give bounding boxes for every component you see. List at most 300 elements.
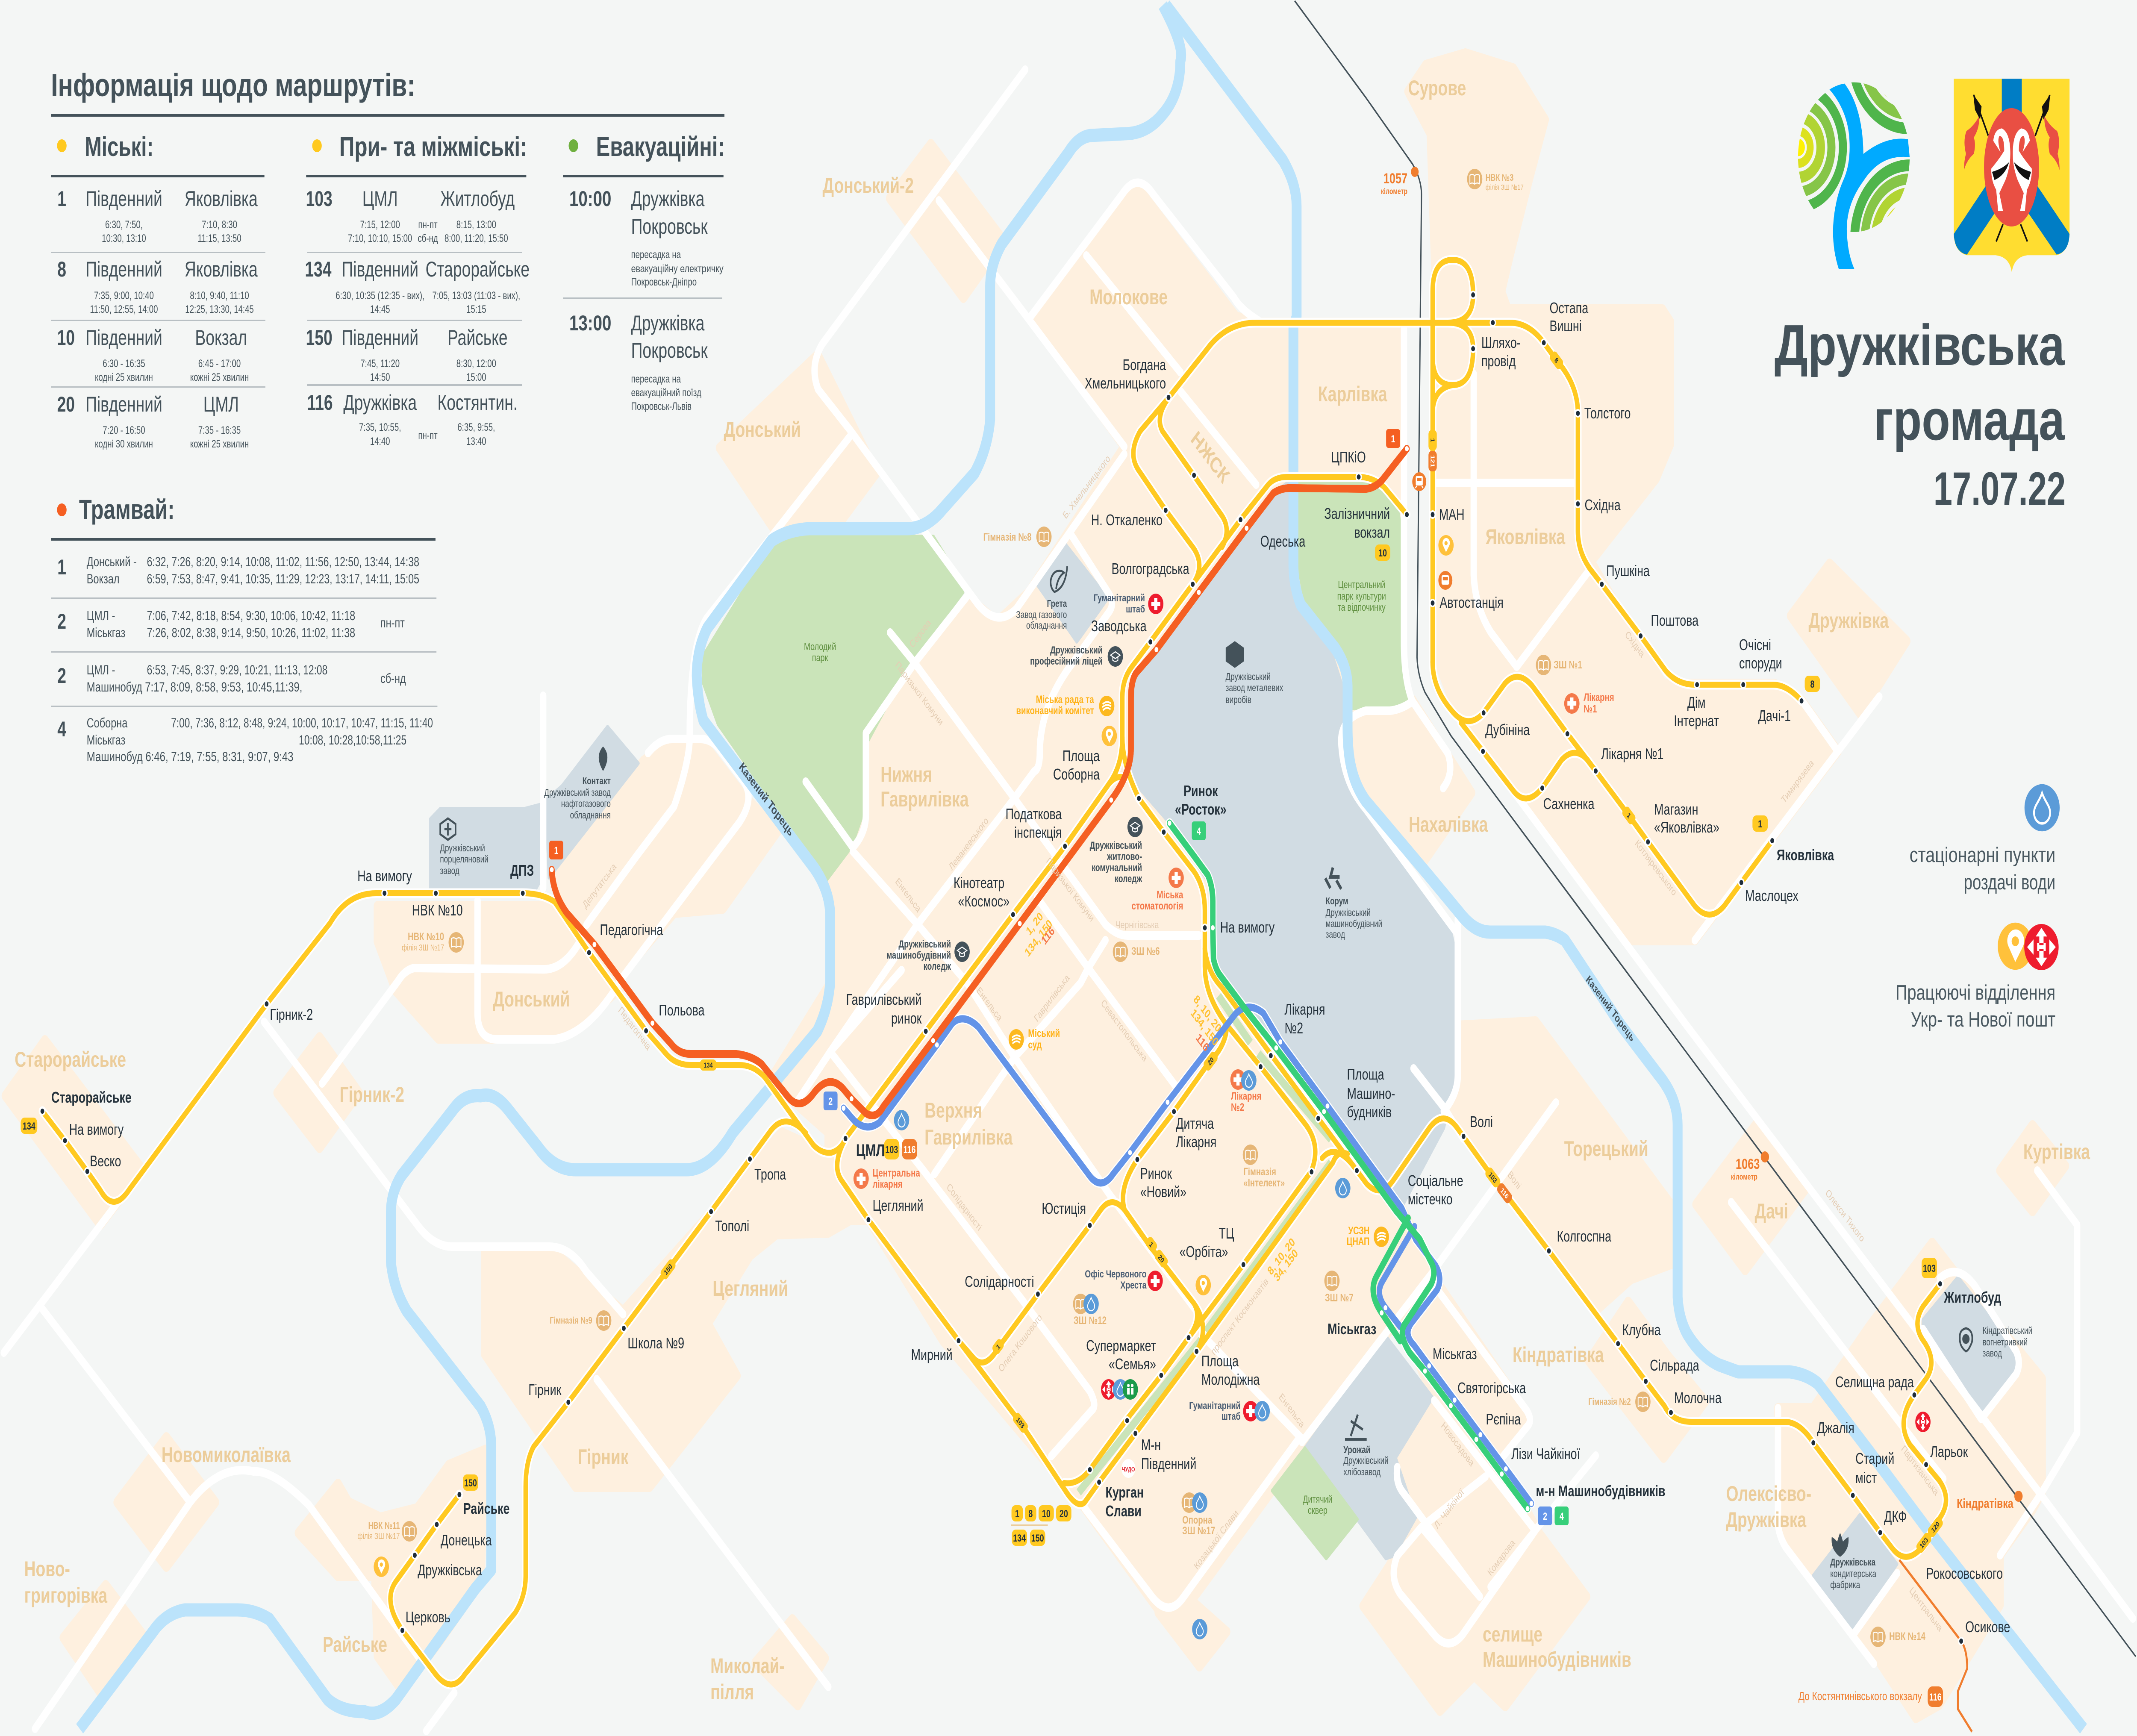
station names: Колгоспна: [1557, 1227, 1611, 1245]
panel: tram schedule: 10:08, 10:28,10:58,11:25: [299, 733, 406, 747]
panel: tram schedule: 1: [57, 556, 66, 579]
station names: ДКФ: [1884, 1508, 1907, 1525]
panel: suburban and intercity routes: 7:35, 10:55,: [359, 421, 401, 433]
station names: вокзал: [1354, 524, 1390, 541]
panel: suburban and intercity routes: 6:35, 9:55,: [457, 421, 495, 433]
railway stops: Кіндратівка: [1957, 1496, 2013, 1511]
river names: Казений Торець: [1584, 973, 1637, 1044]
district names: селище: [1483, 1623, 1542, 1646]
street names: Севастопольська: [1099, 997, 1149, 1064]
station names: Школа №9: [627, 1334, 684, 1352]
panel: suburban and intercity routes: 15:15: [466, 303, 486, 315]
street names: Енгельса: [894, 876, 922, 915]
station names: Дитяча: [1176, 1115, 1214, 1132]
station names: міст: [1855, 1469, 1877, 1486]
station names: Міськгаз: [1433, 1345, 1477, 1362]
panel: tram schedule: 2: [57, 664, 66, 688]
panel: tram schedule: [51, 494, 437, 764]
stations on bus routes: [40, 291, 1964, 1645]
terminus pills: tram and orange routes: [549, 429, 1943, 1707]
terminus pills: bus routes: 8: [1028, 1509, 1033, 1520]
station names: «Орбіта»: [1180, 1243, 1228, 1260]
panel: evacuation routes: пересадка на: [631, 248, 681, 261]
station names: [51, 299, 2010, 1636]
panel: city routes: Міські:: [85, 131, 153, 162]
station names: ЦМЛ: [856, 1141, 885, 1160]
street names: Педагогічна: [617, 1005, 652, 1053]
panel: tram schedule: Міськгаз: [87, 625, 125, 640]
points of interest: labels: Дружківський: [1050, 645, 1103, 656]
station names: Інтернат: [1674, 712, 1719, 730]
district names: Гірник-2: [340, 1083, 404, 1106]
points of interest: labels: №1: [1584, 703, 1597, 715]
station names: Супермаркет: [1086, 1337, 1156, 1354]
station names: Юстиція: [1042, 1200, 1086, 1217]
panel: evacuation routes: 10:00: [569, 187, 611, 211]
route number annotations: [1023, 910, 1300, 1284]
panel: city routes: Південний: [85, 258, 162, 281]
district names: Гаврилівка: [880, 788, 969, 811]
route tags on the lines: 121: [1429, 455, 1435, 467]
station names: Церковь: [406, 1608, 450, 1626]
station names: №2: [1284, 1019, 1303, 1037]
points of interest: labels: коледж: [1115, 874, 1142, 885]
street names: Солідарності: [945, 1181, 983, 1233]
district names: Машинобудівників: [1483, 1648, 1631, 1671]
route number annotations: 116: [1194, 1031, 1211, 1054]
station names: Осикове: [1965, 1618, 2010, 1636]
factory labels: [440, 599, 2032, 1591]
route tags on the lines: 103: [1015, 1416, 1026, 1430]
panel: suburban and intercity routes: 7:10, 10:10, 15:00: [348, 232, 412, 244]
heading: route information: [51, 68, 725, 764]
points of interest: labels: професійний ліцей: [1030, 656, 1103, 667]
station names: Старий: [1855, 1450, 1894, 1467]
station names: Тополі: [715, 1217, 749, 1235]
station names: містечко: [1408, 1190, 1453, 1208]
street names: Олекси Тихого: [1824, 1187, 1866, 1244]
station names: Ларьок: [1930, 1443, 1968, 1460]
panel: city routes: 6:30, 7:50,: [105, 218, 143, 231]
station names: Дім: [1687, 694, 1705, 711]
park labels: та відпочинку: [1338, 602, 1386, 613]
panel: suburban and intercity routes: 15:00: [466, 371, 486, 383]
points of interest: labels: Гімназія №2: [1588, 1397, 1631, 1407]
panel: city routes: Яковлівка: [185, 258, 258, 281]
station names: Очісні: [1739, 636, 1771, 653]
factory labels: Корум: [1326, 896, 1348, 907]
factory labels: Дружківський: [1343, 1456, 1389, 1466]
points of interest: labels: [357, 173, 1926, 1703]
points of interest: labels: стоматологія: [1132, 900, 1183, 912]
title: Дружківська: [1775, 313, 2065, 377]
points of interest: labels: коледж: [924, 961, 951, 972]
panel: suburban and intercity routes: 8:30, 12:00: [456, 357, 496, 370]
station names: споруди: [1739, 654, 1782, 672]
street names: Серова: [908, 617, 933, 650]
factory labels: Дружківський: [440, 843, 485, 854]
logo: coat of arms: [1954, 79, 2069, 272]
points of interest: labels: Гуманітарний: [1094, 593, 1145, 604]
points of interest: labels: філія ЗШ №17: [402, 943, 444, 953]
factory labels: фабрика: [1830, 1580, 1860, 1591]
factory labels: Дружківський: [1326, 908, 1371, 918]
district names: Донський-2: [823, 174, 914, 197]
legend: water points: стаціонарні пункти: [1910, 844, 2055, 867]
terminus pills: bus routes: 20: [1060, 1509, 1068, 1520]
tram route 1 (orange): [552, 449, 1407, 1115]
points of interest: labels: Міська: [1157, 889, 1183, 901]
points of interest: labels: ЗШ №7: [1325, 1292, 1354, 1304]
points of interest: labels: філія ЗШ №17: [1486, 183, 1524, 192]
terminus pills: bus routes: 1: [1015, 1509, 1019, 1520]
station names: «Росток»: [1175, 800, 1227, 818]
station names: Поштова: [1651, 612, 1698, 629]
district names: Яковлівка: [1486, 525, 1565, 549]
district names: Олексієво-: [1726, 1482, 1811, 1506]
panel: city routes: 10: [57, 326, 75, 350]
district names: Дружківка: [1726, 1508, 1807, 1532]
railway stops: кілометр: [1731, 1172, 1757, 1182]
district names: григорівка: [24, 1584, 107, 1607]
yellow bus routes: [42, 260, 1946, 1685]
points of interest: labels: Офіс Червоного: [1085, 1269, 1147, 1280]
route tags on the lines: 20: [1207, 1056, 1215, 1067]
panel: city routes: 7:35 - 16:35: [198, 424, 241, 436]
panel: city routes: 11:50, 12:55, 14:00: [90, 303, 158, 315]
panel: city routes: 7:35, 9:00, 10:40: [94, 289, 154, 302]
district names: Ново-: [24, 1557, 70, 1581]
district names: Донський: [493, 988, 570, 1011]
panel: suburban and intercity routes: Житлобуд: [440, 187, 515, 211]
points of interest: labels: штаб: [1222, 1411, 1241, 1422]
points of interest: labels: Дружківський: [1090, 840, 1142, 851]
factory labels: Кіндратівський: [1982, 1326, 2032, 1336]
route number annotations: 1, 20: [1024, 910, 1045, 938]
terminus pills: bus routes: 103: [1923, 1263, 1936, 1274]
route number annotations: 8, 10, 20: [1266, 1236, 1297, 1278]
street names: Леваневського: [947, 815, 990, 873]
icon: Chudo store: [1121, 1459, 1136, 1478]
points of interest: labels: Дружківський: [898, 939, 951, 950]
points of interest: labels: УСЗН: [1348, 1224, 1369, 1237]
station names: Податкова: [1006, 805, 1062, 823]
station names: Ринок: [1140, 1165, 1172, 1182]
station names: Соборна: [1053, 765, 1100, 783]
station names: Лікарня: [1284, 1000, 1325, 1018]
route number annotations: 116: [1039, 924, 1057, 947]
factory labels: Дружківська: [1830, 1557, 1876, 1568]
panel: suburban and intercity routes: Південний: [341, 326, 418, 350]
points of interest: labels: «Інтелект»: [1243, 1177, 1285, 1189]
station names: Донецька: [441, 1531, 492, 1549]
street names: Олега Кошового: [997, 1312, 1044, 1374]
points of interest: labels: Хреста: [1120, 1280, 1147, 1291]
panel: suburban and intercity routes: Дружківка: [343, 391, 417, 415]
panel: evacuation routes: Покровськ-Львів: [631, 400, 692, 412]
points of interest: labels: НВК №11: [368, 1521, 400, 1531]
panel: suburban and intercity routes: [305, 131, 530, 447]
station names: Волі: [1470, 1113, 1493, 1130]
panel: tram schedule: 2: [57, 610, 66, 633]
station names: Кінотеатр: [954, 874, 1004, 892]
railway stops: 1063: [1736, 1156, 1760, 1172]
panel: evacuation routes: Дружківка: [631, 187, 705, 211]
median green strip on boulevard: [1079, 996, 1331, 1492]
panel: suburban and intercity routes: 103: [306, 187, 333, 211]
station names: Південний: [1141, 1455, 1196, 1472]
terminus pills: tram and orange routes: 4: [1197, 826, 1201, 837]
legend: post offices: Працюючі відділення: [1896, 981, 2055, 1004]
panel: suburban and intercity routes: При- та міжміські:: [339, 131, 527, 162]
points of interest: labels: НВК №14: [1889, 1630, 1926, 1642]
park labels: [804, 580, 1386, 1516]
district names: Верхня: [924, 1099, 982, 1122]
factory labels: обладнання: [1026, 621, 1067, 631]
district names: Нижня: [880, 763, 932, 786]
panel: city routes: Південний: [85, 326, 162, 350]
district names: Дружківка: [1809, 609, 1889, 633]
station names: Польова: [659, 1001, 705, 1019]
station names: Пушкіна: [1606, 562, 1650, 580]
station names: Дубініна: [1485, 721, 1530, 739]
route number annotations: 134, 150: [1189, 1006, 1220, 1049]
panel: suburban and intercity routes: 134: [305, 258, 332, 281]
points of interest: labels: Гімназія №9: [550, 1315, 592, 1326]
terminus pills: bus routes: 10: [1042, 1509, 1051, 1520]
station names: ДПЗ: [510, 862, 534, 879]
district names: Гаврилівка: [924, 1126, 1013, 1149]
station names: Маслоцех: [1745, 887, 1798, 904]
factory labels: Грета: [1047, 599, 1067, 609]
route tags on the lines: [659, 350, 1944, 1555]
terminus pills: tram and orange routes: 1: [1391, 434, 1395, 445]
station names: Молочна: [1674, 1389, 1722, 1406]
station names: Соціальне: [1408, 1172, 1463, 1189]
terminus pills: bus routes: [21, 544, 1937, 1546]
factory labels: Урожай: [1343, 1445, 1370, 1456]
street names: Паризької Комуни: [894, 659, 945, 728]
panel: city routes: 20: [57, 393, 75, 416]
panel: city routes: 6:45 - 17:00: [198, 357, 241, 370]
station names: Житлобуд: [1943, 1289, 2001, 1306]
factory labels: порцеляновий: [440, 854, 489, 865]
station names: Машино-: [1347, 1085, 1395, 1102]
panel: tram schedule: Машинобуд 6:46, 7:19, 7:55, 8:31, 9:07, 9:43: [87, 749, 293, 764]
panel: city routes: кодні 25 хвилин: [95, 371, 153, 383]
station names: Залізничний: [1325, 505, 1390, 522]
title: [1775, 313, 2066, 515]
terminus pills: bus routes: 134: [23, 1121, 35, 1132]
district names: Новомиколаївка: [162, 1443, 291, 1467]
street names: Новосадова: [1439, 1420, 1476, 1469]
station names: Молодіжна: [1201, 1371, 1260, 1388]
icon: Chudo store: ЧУДО: [1122, 1465, 1135, 1473]
terminus pills: bus routes: 134: [1013, 1533, 1026, 1544]
station names: ТЦ: [1219, 1224, 1234, 1242]
legend: water points: роздачі води: [1964, 871, 2055, 894]
railway stops: [1381, 167, 2022, 1511]
panel: city routes: 12:25, 13:30, 14:45: [185, 303, 254, 315]
points of interest: labels: лікарня: [873, 1178, 903, 1190]
district names: Кіндратівка: [1513, 1343, 1604, 1367]
route tags on the lines: 120: [1930, 1520, 1941, 1534]
panel: city routes: [51, 131, 265, 450]
route tags on the lines: 1: [1429, 438, 1435, 442]
points of interest: labels: НВК №10: [408, 930, 444, 943]
district names: Куртівка: [2023, 1140, 2090, 1164]
street names: Енгельса: [1277, 1392, 1306, 1430]
station names: Старорайське: [51, 1089, 132, 1106]
panel: tram schedule: Трамвай:: [79, 494, 174, 525]
factory labels: нафтогазового: [561, 799, 611, 809]
panel: city routes: кожні 25 хвилин: [190, 438, 249, 450]
park labels: Дитячий: [1303, 1494, 1333, 1505]
map: industrial zones and parks: [430, 482, 2016, 1627]
street names: Л. Чайкіної: [1433, 1487, 1466, 1531]
street names: Гаврилівська: [1033, 972, 1071, 1024]
station names: Селищна рада: [1835, 1373, 1914, 1391]
points of interest: labels: ЗШ №12: [1074, 1314, 1107, 1327]
panel: suburban and intercity routes: Південний: [341, 258, 418, 281]
divider under terminus pills: [1011, 1524, 1048, 1526]
panel: suburban and intercity routes: пн-пт: [418, 218, 438, 231]
street names: Паризької Комуни: [1045, 856, 1096, 924]
points of interest: labels: штаб: [1126, 604, 1145, 615]
station names: Остапа: [1550, 299, 1588, 317]
logo: community tree: [1798, 82, 1910, 269]
panel: suburban and intercity routes: 7:45, 11:20: [360, 357, 400, 370]
panel: evacuation routes: [563, 131, 725, 412]
station names: МАН: [1439, 506, 1464, 523]
railway stops: 1057: [1383, 171, 1407, 187]
terminus pills: bus routes: 10: [1378, 548, 1387, 559]
points of interest: labels: НВК №3: [1486, 173, 1513, 183]
station names: Веско: [90, 1152, 121, 1170]
station names: Святогірська: [1457, 1379, 1526, 1397]
station names: інспекція: [1014, 824, 1062, 841]
points of interest: labels: ЗШ №1: [1554, 659, 1582, 671]
panel: evacuation routes: евакуаційну електричку: [631, 262, 724, 275]
points of interest: labels: Лікарня: [1584, 691, 1614, 703]
station names: Клубна: [1622, 1321, 1661, 1339]
title: 17.07.22: [1934, 462, 2066, 515]
route tags on the lines: 1: [1625, 811, 1632, 820]
points of interest: labels: Лікарня: [1231, 1090, 1262, 1102]
station names: Одеська: [1260, 533, 1305, 550]
panel: suburban and intercity routes: 14:45: [370, 303, 390, 315]
park labels: парк культури: [1337, 591, 1386, 602]
park labels: Молодий: [804, 641, 836, 653]
station names: Гаврилівський: [846, 991, 921, 1008]
railway stops: кілометр: [1381, 187, 1407, 196]
route tags on the lines: 103: [1919, 1536, 1929, 1550]
points of interest: labels: Центральна: [873, 1167, 920, 1179]
route tags on the lines: 20: [1157, 1253, 1165, 1265]
panel: tram schedule: Вокзал: [87, 571, 119, 586]
panel: city routes: 7:20 - 16:50: [103, 424, 145, 436]
factory labels: Дружківський: [1225, 672, 1271, 683]
station names: «Семья»: [1109, 1355, 1156, 1373]
panel: tram schedule: пн-пт: [380, 615, 405, 630]
panel: suburban and intercity routes: Старорайське: [426, 258, 530, 281]
panel: suburban and intercity routes: пн-пт: [418, 429, 438, 441]
street names: Козацької Слави: [1192, 1508, 1240, 1572]
panel: suburban and intercity routes: 150: [306, 326, 333, 350]
panel: evacuation routes: Покровськ: [631, 339, 708, 362]
points of interest: labels: Міський: [1028, 1027, 1060, 1039]
street names: Центральна: [1907, 1585, 1944, 1634]
factory labels: завод: [1326, 930, 1345, 940]
route tags on the lines: 1: [1148, 1240, 1154, 1249]
park labels: сквер: [1308, 1505, 1328, 1516]
river names: [737, 760, 1637, 1044]
district names: Донський: [724, 418, 801, 441]
park labels: Центральний: [1338, 580, 1385, 591]
points of interest: labels: житлово-: [1107, 851, 1142, 862]
panel: suburban and intercity routes: ЦМЛ: [362, 187, 398, 211]
station names: Богдана: [1123, 356, 1166, 374]
panel: suburban and intercity routes: 14:40: [370, 435, 390, 447]
panel: suburban and intercity routes: 8:15, 13:00: [456, 218, 496, 231]
panel: evacuation routes: 13:00: [569, 312, 611, 335]
route tags on the lines: 116: [1499, 1186, 1510, 1200]
district names: НЖСК: [1187, 427, 1233, 488]
station names: будників: [1347, 1103, 1392, 1121]
street names: Східна: [1623, 629, 1646, 660]
panel: suburban and intercity routes: 116: [307, 391, 333, 415]
panel: suburban and intercity routes: 7:15, 12:00: [360, 218, 400, 231]
station names: Площа: [1347, 1065, 1384, 1083]
points of interest: labels: Опорна: [1182, 1514, 1213, 1526]
panel: tram schedule: 6:32, 7:26, 8:20, 9:14, 10:08, 11:02, 11:56, 12:50, 13:44, 14:38: [147, 554, 419, 569]
district names: пілля: [710, 1680, 754, 1704]
station names: Тропа: [754, 1165, 786, 1183]
district names: Райське: [323, 1633, 387, 1657]
factory labels: завод: [1982, 1348, 2002, 1359]
station names: ЦПКіО: [1331, 448, 1366, 466]
station names: Лікарня №1: [1601, 745, 1663, 762]
terminus pills: bus routes: 1: [1758, 819, 1762, 830]
station names: Ринок: [1183, 782, 1218, 800]
points of interest: labels: виконавчий комітет: [1016, 704, 1094, 717]
factory labels: завод металевих: [1225, 683, 1283, 694]
station names: провід: [1481, 352, 1516, 370]
station names: Вишні: [1550, 317, 1582, 335]
panel: tram schedule: Машинобуд 7:17, 8:09, 8:58, 9:53, 10:45,11:39,: [87, 680, 302, 694]
route casing (white outline under every line): [42, 260, 1946, 1685]
street names: Енгельса: [975, 985, 1004, 1024]
tram route 4 (green): [1169, 823, 1528, 1509]
district names: Торецький: [1564, 1137, 1648, 1161]
terminus pills: bus routes: 150: [1031, 1533, 1044, 1544]
district names: Миколай-: [710, 1654, 785, 1678]
panel: city routes: 6:30 - 16:35: [103, 357, 145, 370]
street names: Б. Хмельницького: [1061, 453, 1112, 521]
river names: Казений Торець: [737, 760, 796, 839]
station names: Яковлівка: [1777, 846, 1834, 864]
station names: «Космос»: [958, 892, 1010, 910]
terminus pills: tram and orange routes: 2: [828, 1096, 833, 1107]
station names: Площа: [1063, 747, 1100, 765]
panel: tram schedule: 6:53, 7:45, 8:37, 9:29, 10:21, 11:13, 12:08: [147, 662, 327, 677]
terminus pills: bus routes: 103: [885, 1145, 898, 1156]
points of interest: labels: ЦНАП: [1347, 1235, 1369, 1248]
terminus pills: tram and orange routes: 2: [1543, 1511, 1547, 1522]
route tags on the lines: 150: [663, 1262, 674, 1277]
map: railway line: [1295, 1, 2136, 1657]
heading: route information: Інформація щодо маршрутів:: [51, 68, 415, 103]
